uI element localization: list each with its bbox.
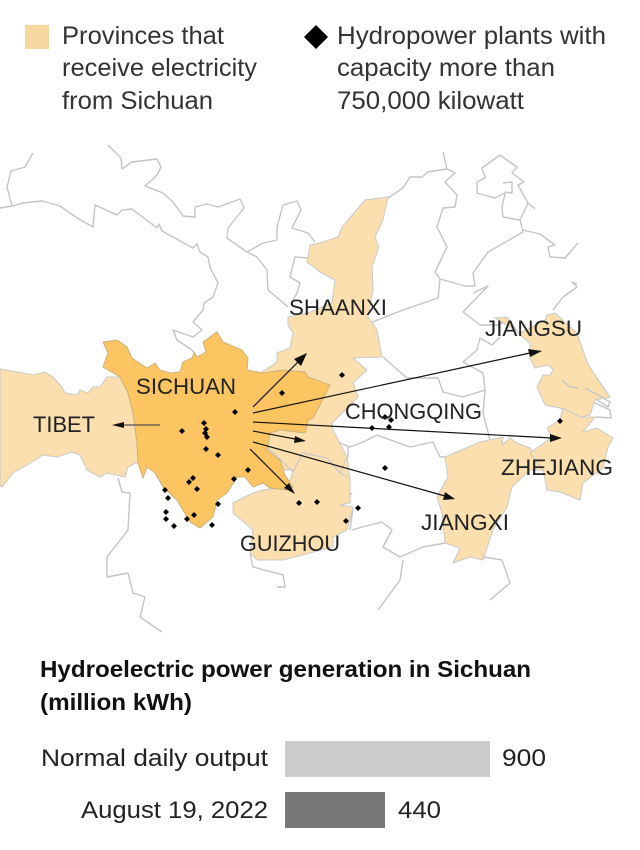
province: Zhejiang <box>530 408 613 500</box>
bar: August 19, 2022: August 19, 2022 <box>81 797 268 824</box>
bar: normal daily output: 900 <box>502 745 546 772</box>
province: Jiangsu <box>495 313 610 417</box>
province: Shaanxi and Chongqing <box>250 197 388 490</box>
province labels: CHONGQING <box>345 399 482 424</box>
legend: hydropower plants: 750,000 kilowatt <box>337 87 524 115</box>
province: Guizhou <box>233 453 353 560</box>
chart title <box>40 656 531 715</box>
legend: provinces: receive electricity <box>62 54 257 82</box>
province: Jiangxi <box>437 437 543 563</box>
chart title: Hydroelectric power generation in Sichuan <box>40 656 531 682</box>
bar: August 19, 2022 <box>81 792 441 828</box>
bar: August 19, 2022: 440 <box>398 797 441 824</box>
lake and coast lines <box>562 380 611 418</box>
Chongqing and Guizhou border <box>267 447 348 477</box>
hydropower plant markers <box>162 372 563 529</box>
bar: normal daily output: Normal daily output <box>41 745 268 772</box>
province labels: ZHEJIANG <box>501 455 613 480</box>
legend: provinces: from Sichuan <box>62 87 213 115</box>
legend: provinces <box>25 22 257 115</box>
legend: hydropower plants: Hydropower plants with <box>337 22 606 50</box>
province labels: SICHUAN <box>136 374 236 399</box>
chart title: (million kWh) <box>40 689 192 715</box>
province labels <box>33 295 613 556</box>
legend: hydropower plants: capacity more than <box>337 54 555 82</box>
map <box>0 145 613 632</box>
legend: hydropower plants <box>304 22 606 115</box>
province: Tibet <box>0 369 138 487</box>
bar chart <box>41 741 546 828</box>
arrows <box>112 349 562 500</box>
province labels: TIBET <box>33 412 95 437</box>
province labels: JIANGXI <box>421 510 509 535</box>
province boundary lines <box>0 145 578 632</box>
province: Sichuan <box>103 332 330 528</box>
province labels: GUIZHOU <box>240 531 340 556</box>
province labels: SHAANXI <box>289 295 387 320</box>
province labels: JIANGSU <box>485 316 582 341</box>
bar: normal daily output <box>41 741 546 777</box>
legend: provinces: Provinces that <box>62 22 224 50</box>
